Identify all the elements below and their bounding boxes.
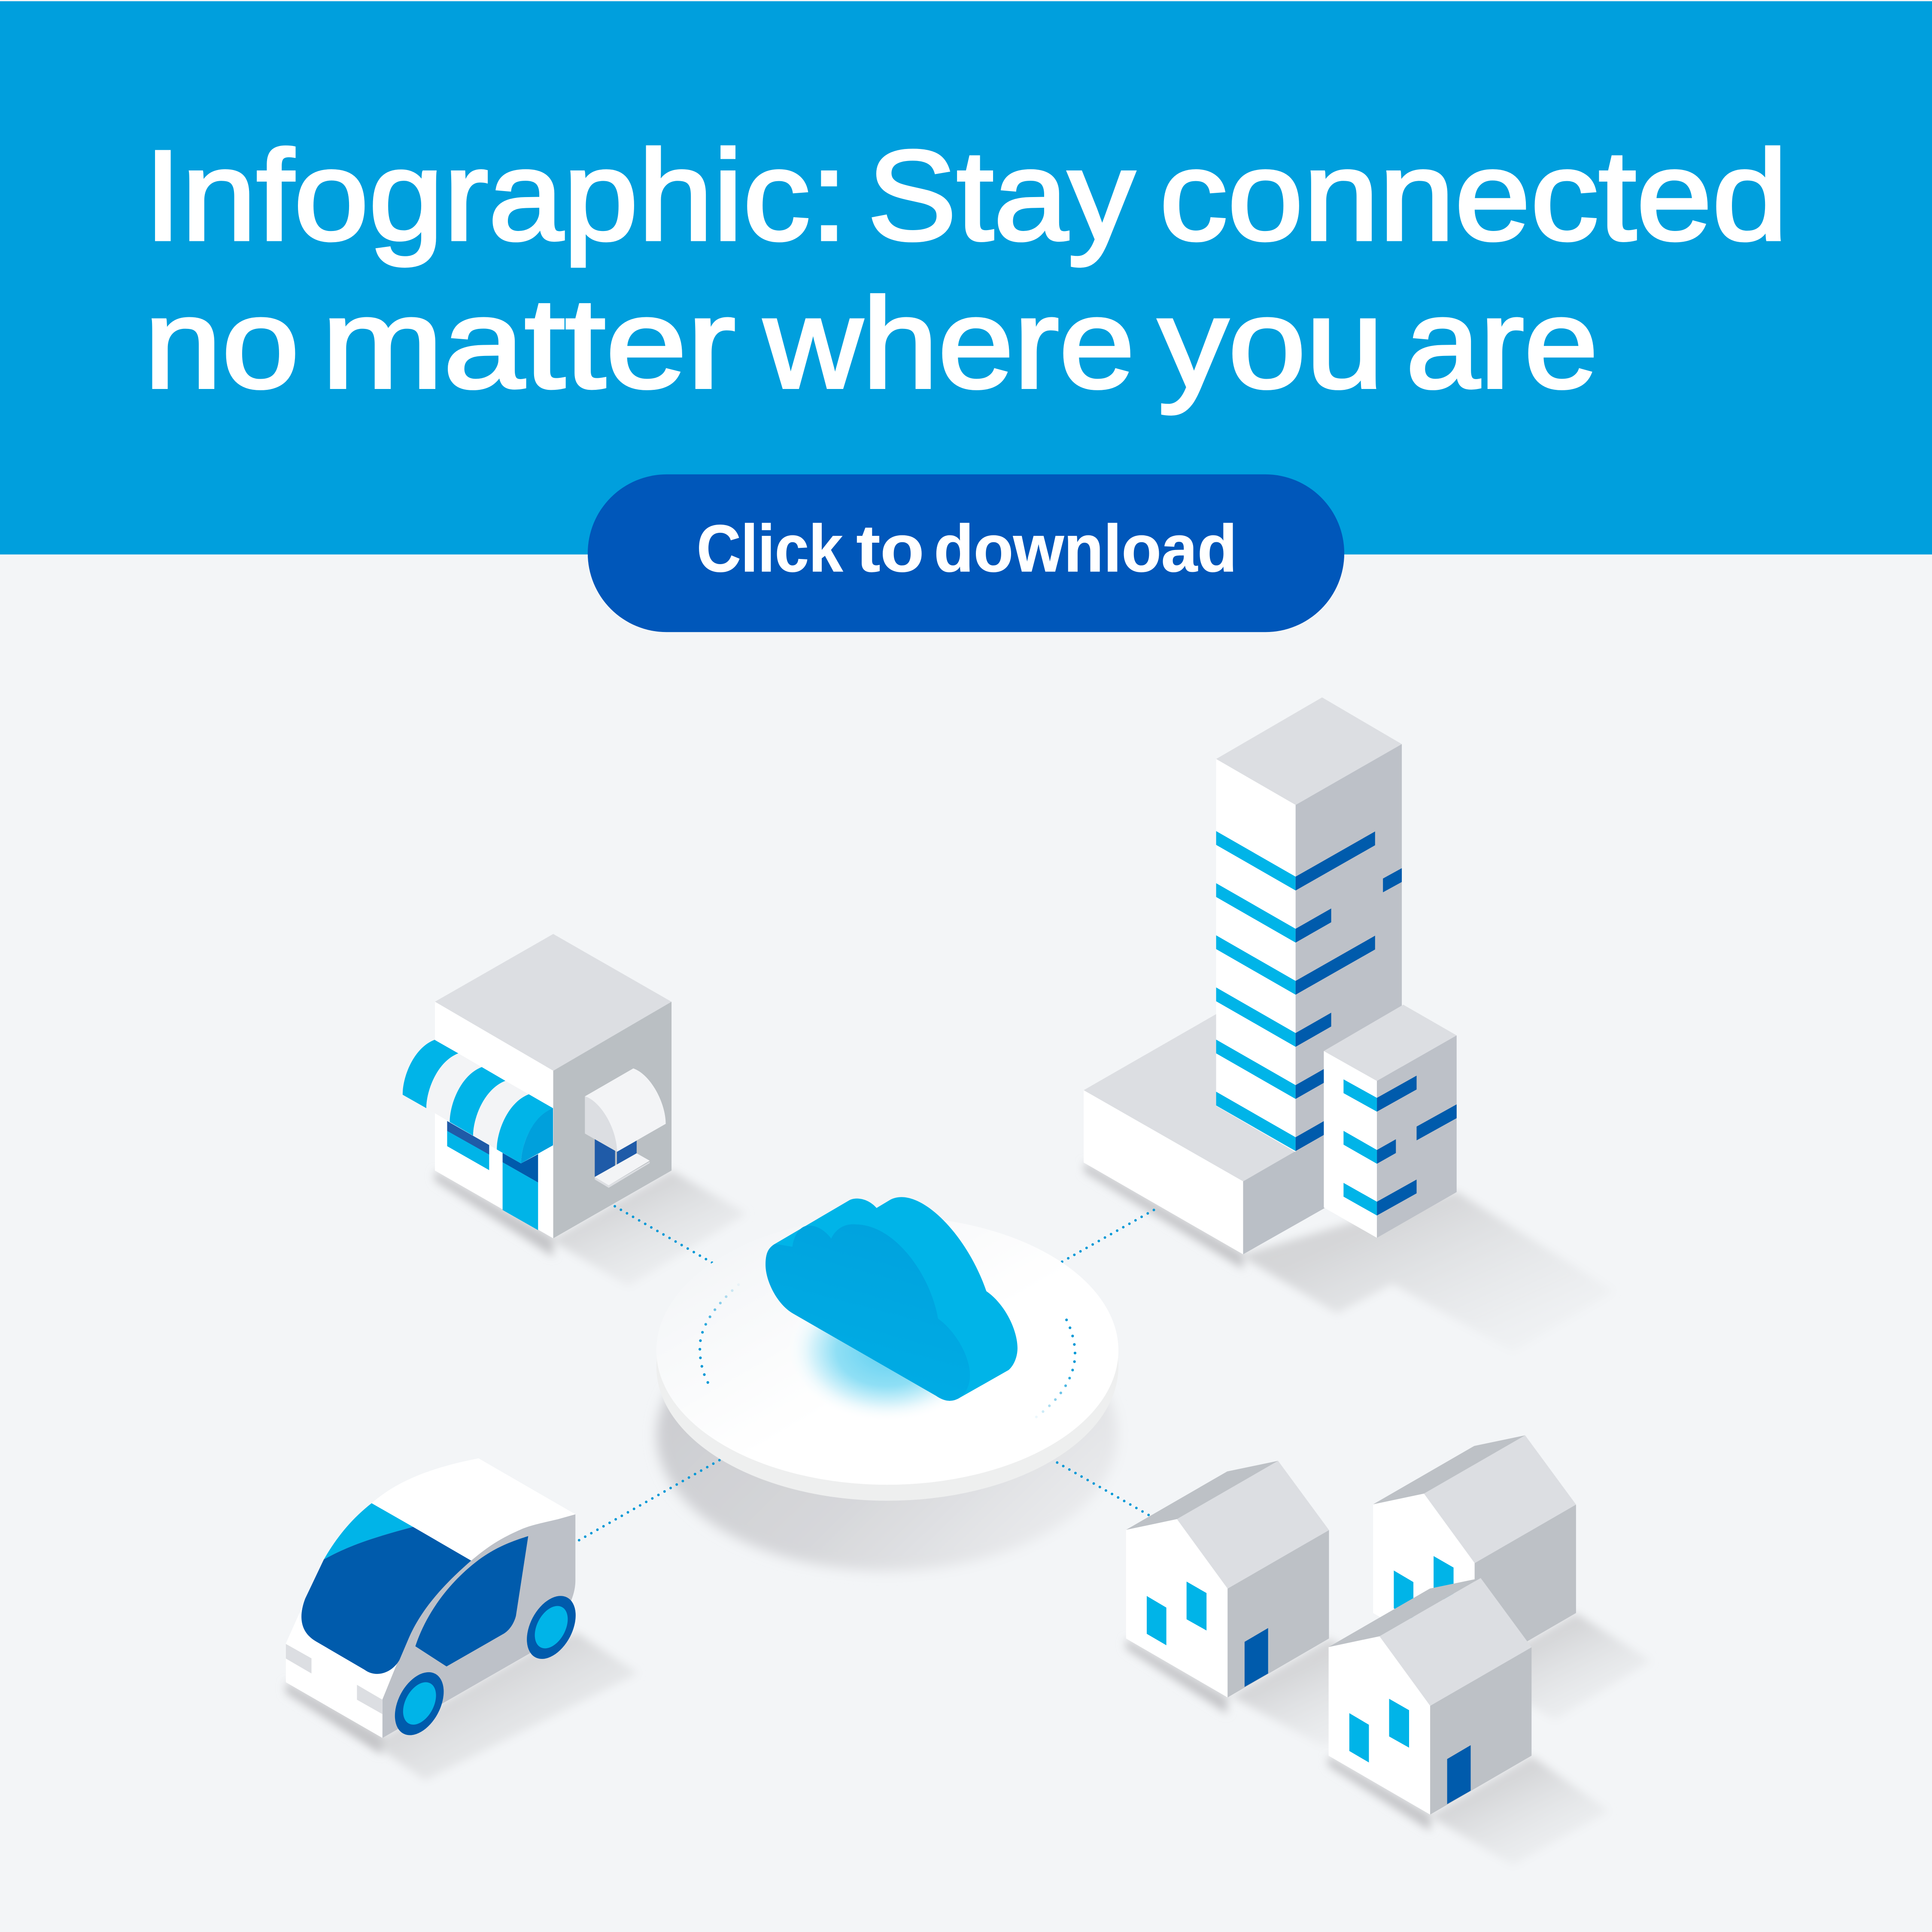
title: are [1406,272,1598,415]
house back right [1373,1435,1576,1672]
house left [1126,1461,1329,1698]
windshield tint [324,1503,413,1559]
store window [447,1121,489,1170]
cloud back [775,1197,1018,1401]
office shadow [1084,1162,1614,1352]
side window [415,1536,528,1667]
house front [1329,1578,1531,1814]
office buildings [1084,697,1457,1255]
windshield [301,1527,471,1674]
download button: download [934,511,1237,586]
tower [1216,697,1402,1152]
store side wall [553,1002,671,1238]
cloud [766,1197,1018,1401]
title: Infographic: [144,124,848,267]
cloud glow [786,1279,988,1422]
connector dots [579,1206,1158,1540]
low block [1084,999,1401,1255]
car side panel [383,1514,575,1738]
orbit dots [700,1285,1075,1418]
store roof [435,934,671,1071]
small block [1324,1005,1457,1238]
car [286,1458,586,1744]
download button: Click [697,511,843,586]
small block windows [1343,1075,1457,1215]
headlights [286,1644,383,1714]
houses shadows [1126,1613,1651,1865]
central platform shadow [657,1300,1118,1571]
central platform [656,1216,1118,1501]
car body [286,1458,575,1738]
tower window stripes [1216,831,1402,1151]
title: you [1158,272,1384,416]
striped awning [403,1040,553,1163]
store door [503,1153,538,1230]
title: where [762,272,1135,415]
store shadow [435,1170,747,1286]
front wall edge shadows [286,1162,1431,1831]
title [144,124,1788,416]
title: no [144,272,299,415]
download button [588,474,1344,632]
store [403,934,671,1238]
rear wheel [517,1588,586,1667]
title: Stay [867,124,1135,267]
car shadow [286,1633,638,1780]
front wheel [385,1664,454,1744]
store front wall [435,1002,553,1238]
header band [0,1,1932,554]
title: matter [322,272,735,415]
side window [585,1068,666,1188]
cloud front [766,1224,970,1401]
title: connected [1160,124,1788,267]
download button: to [857,511,924,586]
